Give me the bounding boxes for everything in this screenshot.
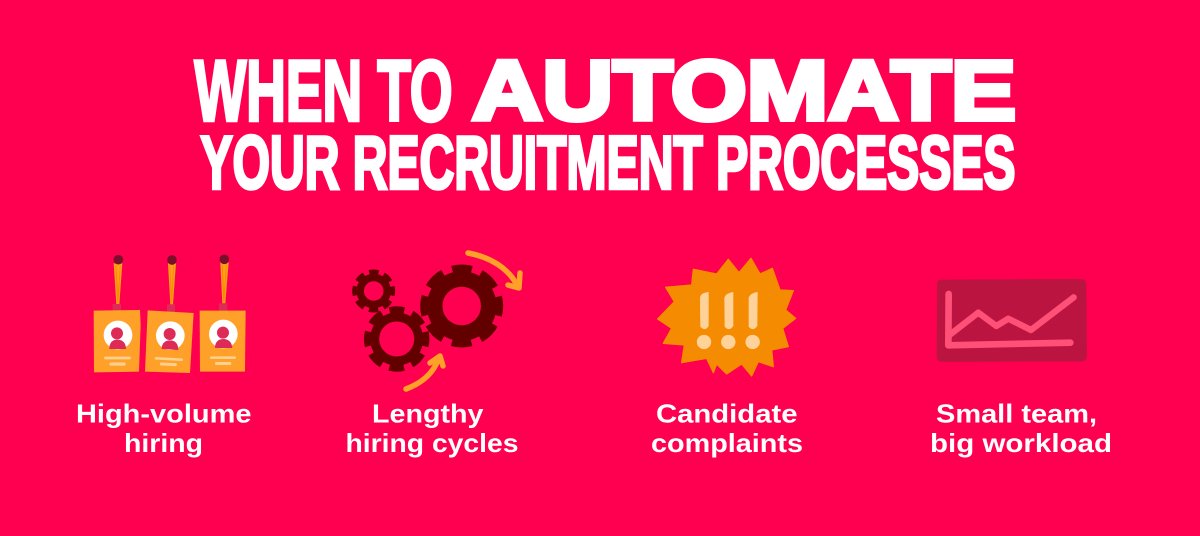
label: lengthy hiring cycles: [346, 398, 518, 458]
chart panel: [937, 279, 1087, 362]
medium gear: [368, 310, 425, 368]
small gear: [355, 272, 392, 310]
chart axes: [948, 294, 1070, 345]
title: automate: AUTOMATE: [472, 44, 1016, 138]
title: [194, 44, 1016, 204]
label: high-volume hiring: High-volume: [76, 398, 252, 428]
arrow: top right: [468, 253, 520, 288]
icon: line chart panel: [937, 279, 1087, 362]
exclamation marks: [697, 292, 760, 349]
badge two: [145, 255, 194, 373]
chart line: [950, 297, 1074, 335]
label: small team, big workload: [930, 398, 1112, 458]
large gear: [426, 270, 498, 342]
badge one: [94, 255, 141, 372]
icon: three ID badges: [94, 254, 246, 373]
label: high-volume hiring: [76, 398, 252, 458]
label: small team, big workload: Small team,: [936, 398, 1097, 428]
burst shape: [658, 258, 796, 376]
icon: complaint burst: [658, 258, 796, 376]
label: lengthy hiring cycles: Lengthy: [372, 398, 484, 428]
label: candidate complaints: Candidate: [656, 398, 798, 428]
label: high-volume hiring: hiring: [124, 428, 203, 458]
label: candidate complaints: [651, 398, 803, 458]
label: candidate complaints: complaints: [651, 428, 803, 458]
label: small team, big workload: big workload: [930, 428, 1112, 458]
label: lengthy hiring cycles: hiring cycles: [346, 428, 518, 458]
icon: gears with rotation arrows: [355, 253, 520, 389]
badge three: [200, 254, 246, 372]
arrow: bottom: [406, 356, 443, 389]
title: when to: WHEN TO: [194, 44, 452, 140]
